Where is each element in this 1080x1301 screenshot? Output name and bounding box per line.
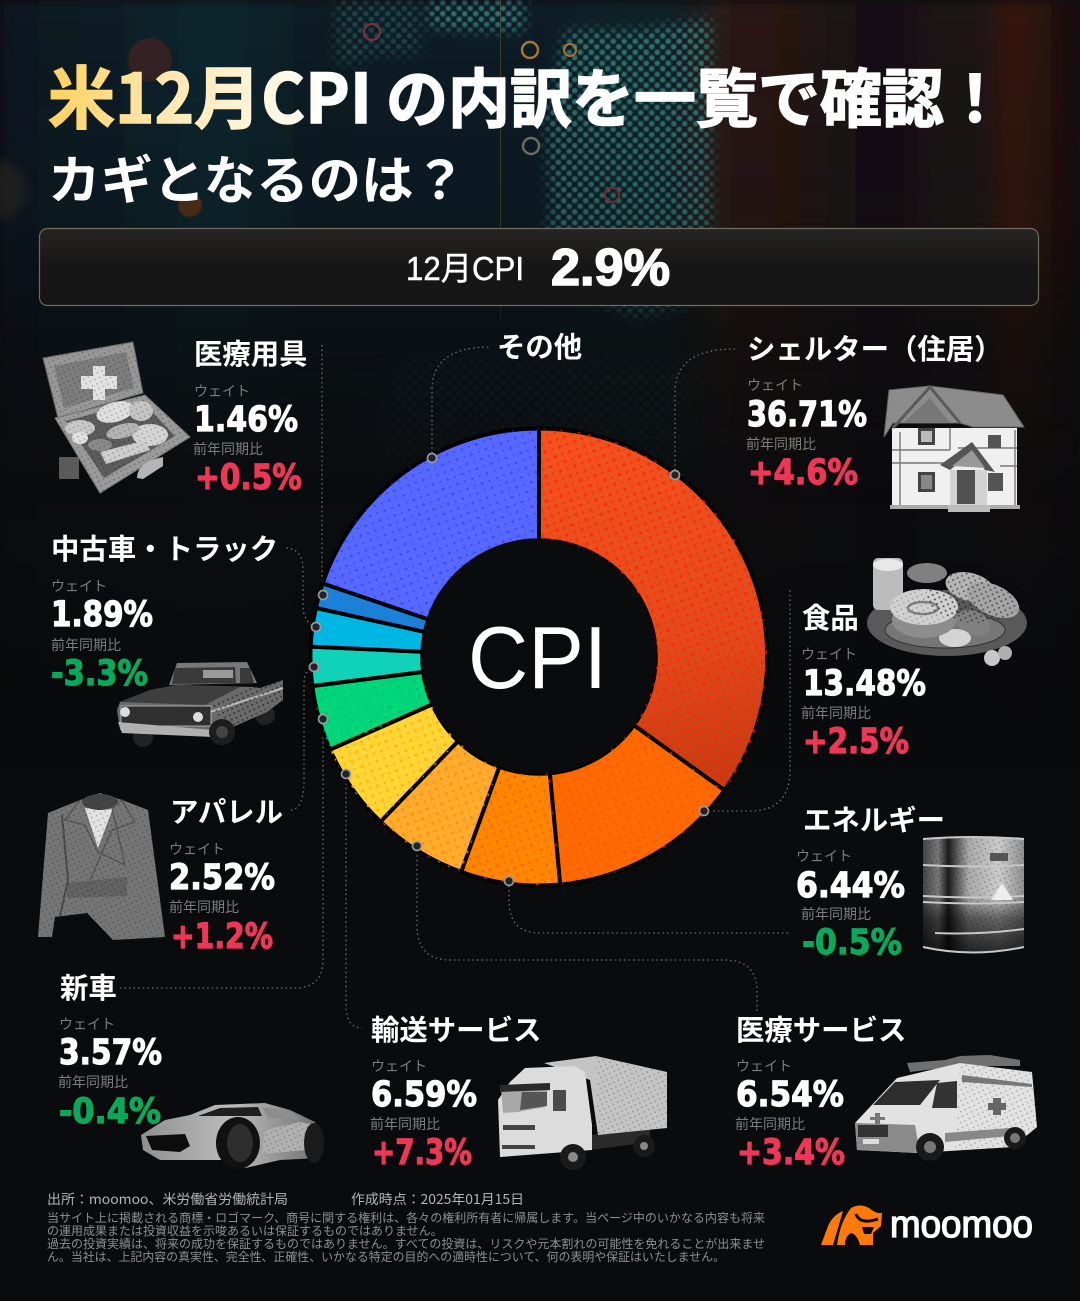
center hole <box>422 540 656 774</box>
weight label: ウェイト <box>169 839 225 859</box>
weight value: 13.48% <box>803 664 926 704</box>
yoy value: -0.5% <box>802 923 902 963</box>
weight label: ウェイト <box>371 1056 427 1076</box>
weight label: ウェイト <box>51 576 107 596</box>
weight value: 6.59% <box>371 1075 477 1115</box>
yoy value: +4.6% <box>748 453 858 493</box>
disclaimer: の運用成果または投資収益を示唆あるいは保証するものではありません。 <box>47 1222 443 1239</box>
yoy label: 前年同期比 <box>193 439 263 459</box>
icon: first aid case <box>43 342 190 493</box>
icon: sports car <box>141 1103 324 1169</box>
panel: new cars <box>58 966 324 1169</box>
weight value: 2.52% <box>169 858 275 898</box>
segment: energy <box>461 767 560 886</box>
heading: エネルギー <box>803 798 945 839</box>
segment: medical goods <box>316 583 428 632</box>
weight value: 1.89% <box>51 595 153 635</box>
yoy label: 前年同期比 <box>58 1072 128 1092</box>
heading: 輸送サービス <box>371 1008 541 1049</box>
wordmark: moomoo <box>890 1204 1033 1246</box>
heading: シェルター（住居） <box>747 327 1003 368</box>
panel: apparel <box>38 790 283 957</box>
yoy value: +3.4% <box>737 1133 845 1173</box>
headline label: 12月CPI <box>406 250 524 287</box>
panel: energy <box>796 798 1024 963</box>
segment: used cars <box>311 608 425 652</box>
segment: transport services <box>330 704 458 822</box>
yoy label: 前年同期比 <box>735 1114 805 1134</box>
weight label: ウェイト <box>194 381 250 401</box>
yoy value: +7.3% <box>372 1133 472 1173</box>
center label: CPI <box>468 608 607 707</box>
disclaimer: 過去の投資実績は、将来の成功を保証するものではありません。すべての投資は、リスクや元本割れの可能性を免れることが出来ませ <box>47 1235 765 1252</box>
yoy value: -0.4% <box>59 1092 161 1132</box>
disclaimer: ん。当社は、上記内容の真実性、完全性、正確性、いかなる特定の目的への適時性について、何の表明や保証はいたしません。 <box>47 1248 725 1265</box>
disclaimer <box>47 1209 765 1265</box>
heading: 新車 <box>60 966 117 1007</box>
disclaimer: 当サイト上に掲載される商標・ロゴマーク、商号に関する権利は、各々の権利所有者に帰属します。当ページ中のいかなる内容も将来 <box>47 1209 765 1226</box>
donut chart <box>310 428 767 886</box>
weight label: ウェイト <box>736 1056 792 1076</box>
segment: other <box>323 428 539 619</box>
source line <box>47 1188 524 1208</box>
icon: bull <box>821 1206 882 1245</box>
icon: jacket <box>38 793 165 940</box>
weight value: 1.46% <box>194 400 298 440</box>
yoy label: 前年同期比 <box>801 904 871 924</box>
weight value: 6.54% <box>736 1075 844 1115</box>
icon: oil drum <box>923 837 1024 952</box>
logo: moomoo <box>821 1204 1033 1246</box>
weight label: ウェイト <box>801 644 857 664</box>
weight label: ウェイト <box>747 375 803 395</box>
panel: shelter <box>746 327 1024 512</box>
segment: food <box>550 725 724 885</box>
heading: 医療用具 <box>194 332 308 373</box>
panel: medical services <box>735 1008 1037 1173</box>
weight label: ウェイト <box>59 1014 115 1034</box>
weight value: 36.71% <box>747 395 867 435</box>
yoy label: 前年同期比 <box>169 897 239 917</box>
yoy label: 前年同期比 <box>746 434 816 454</box>
icon: food plate <box>867 558 1027 666</box>
subtitle: カギとなるのは？ <box>48 139 466 214</box>
heading: other: その他 <box>497 325 582 366</box>
segment: apparel <box>310 647 423 686</box>
segment: medical services <box>381 741 499 872</box>
panel: transport services <box>370 1008 667 1173</box>
heading: 中古車・トラック <box>51 527 278 568</box>
yoy value: +0.5% <box>195 458 302 498</box>
icon: ambulance <box>855 1055 1037 1161</box>
yoy label: 前年同期比 <box>51 635 121 655</box>
title: の内訳を一覧で確認！ <box>386 49 1006 141</box>
yoy label: 前年同期比 <box>370 1114 440 1134</box>
connector lines <box>120 345 790 1028</box>
icon: box truck <box>498 1056 667 1170</box>
source line: 出所：moomoo、米労働省労働統計局 <box>47 1188 288 1208</box>
panel: used cars and trucks <box>51 527 283 747</box>
panel: medical goods <box>43 332 308 498</box>
weight value: 6.44% <box>796 866 905 906</box>
headline CPI bar <box>40 228 1038 306</box>
weight label: ウェイト <box>796 846 852 866</box>
headline value: 2.9% <box>551 239 670 297</box>
connector dots <box>310 454 708 886</box>
segment: shelter <box>539 428 767 790</box>
weight value: 3.57% <box>59 1033 162 1073</box>
heading: 食品 <box>802 596 859 637</box>
background <box>0 0 1079 437</box>
panel: food <box>801 558 1027 762</box>
title: 米12月CPI <box>48 44 372 143</box>
yoy value: +1.2% <box>171 917 273 957</box>
yoy value: +2.5% <box>803 722 909 762</box>
source line: 作成時点：2025年01月15日 <box>351 1188 524 1208</box>
icon: house <box>884 386 1024 512</box>
yoy label: 前年同期比 <box>801 703 871 723</box>
segment: new cars <box>312 672 432 750</box>
heading: アパレル <box>170 790 283 831</box>
icon: pickup truck <box>117 662 283 747</box>
heading: 医療サービス <box>736 1008 906 1049</box>
title <box>48 44 1006 143</box>
yoy value: -3.3% <box>51 654 148 694</box>
